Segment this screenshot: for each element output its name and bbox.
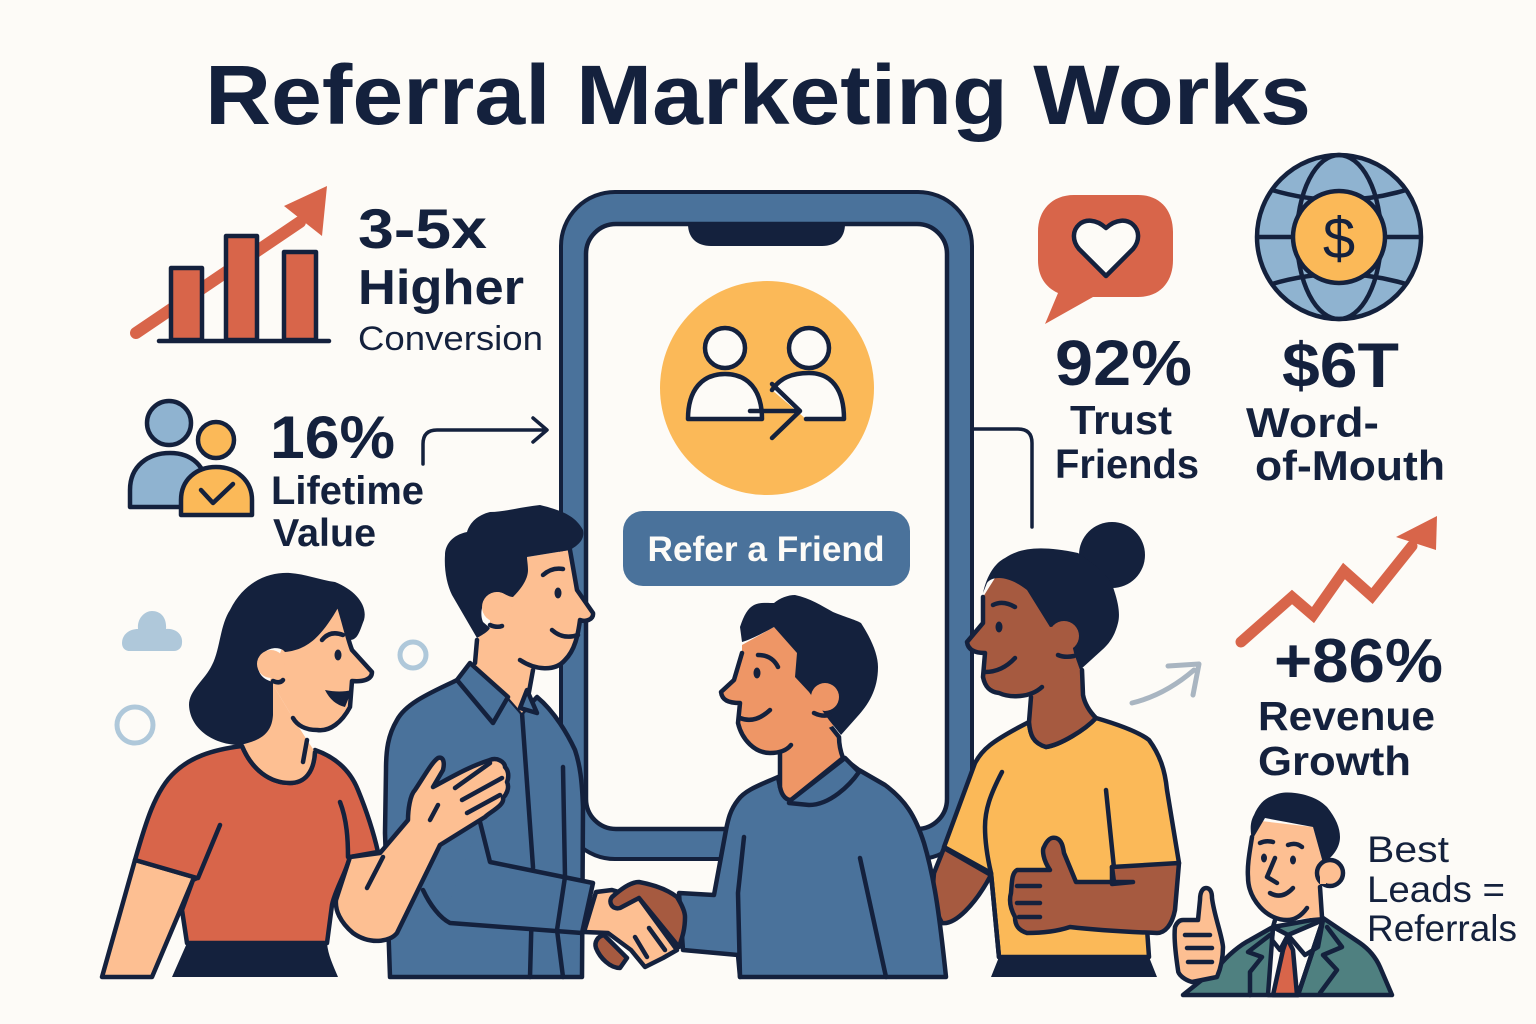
stat: 3-5x higher conversion: Conversion [358, 320, 543, 358]
title: Referral Marketing Works [205, 48, 1311, 142]
stat: $6T word-of-mouth [1246, 331, 1445, 489]
decoration: small ring [400, 642, 426, 668]
stat: 3-5x higher conversion [358, 197, 543, 358]
stat: 3-5x higher conversion: Higher [358, 261, 524, 315]
stat: 92% trust friends [1055, 327, 1199, 487]
decoration: large ring [117, 707, 153, 743]
stat: 16% lifetime value: 16% [270, 404, 395, 471]
stat: 3-5x higher conversion: 3-5x [358, 197, 487, 260]
icon: bar chart with arrow [136, 186, 329, 341]
stat: 92% trust friends: Trust [1070, 397, 1172, 443]
stat: +86% revenue growth: Growth [1258, 738, 1411, 784]
stat: +86% revenue growth: +86% [1274, 627, 1443, 696]
person: woman in yellow shirt [933, 522, 1179, 977]
stat: 16% lifetime value: Value [273, 512, 376, 555]
text: best leads = referrals: Best [1367, 829, 1450, 870]
person: man shaking hands [679, 595, 946, 977]
icon: refer a friend circle [660, 281, 874, 495]
arrow: light grey-blue [1132, 664, 1199, 703]
person: businessman with thumbs up [1175, 792, 1392, 995]
icon: growth arrow [1241, 516, 1437, 642]
stat: $6T word-of-mouth: Word- [1246, 399, 1379, 446]
arrow: to phone [423, 418, 547, 464]
icon: two customers with check [130, 401, 252, 515]
button: refer a friend: Refer a Friend [648, 530, 884, 569]
icon: globe with dollar [1257, 155, 1421, 319]
stat: +86% revenue growth [1258, 627, 1443, 784]
icon: heart speech bubble [1038, 195, 1173, 324]
icon: globe with dollar: $ [1323, 206, 1355, 271]
connector: phone to friend [974, 429, 1032, 527]
person: woman in red shirt [102, 573, 508, 977]
stat: $6T word-of-mouth: of-Mouth [1255, 442, 1445, 489]
stat: +86% revenue growth: Revenue [1258, 693, 1435, 739]
stat: 92% trust friends: Friends [1055, 441, 1199, 487]
text: best leads = referrals [1367, 829, 1517, 949]
stat: 92% trust friends: 92% [1055, 327, 1192, 399]
stat: 16% lifetime value [270, 404, 424, 555]
text: best leads = referrals: Leads = [1367, 869, 1505, 910]
text: best leads = referrals: Referrals [1367, 908, 1517, 949]
icon: cloud [122, 611, 182, 651]
stat: $6T word-of-mouth: $6T [1282, 331, 1399, 401]
handshake [584, 882, 685, 968]
stat: 16% lifetime value: Lifetime [271, 469, 424, 513]
icon: phone [561, 192, 972, 859]
button: refer a friend [623, 511, 910, 586]
person: man in blue shirt [385, 505, 593, 977]
